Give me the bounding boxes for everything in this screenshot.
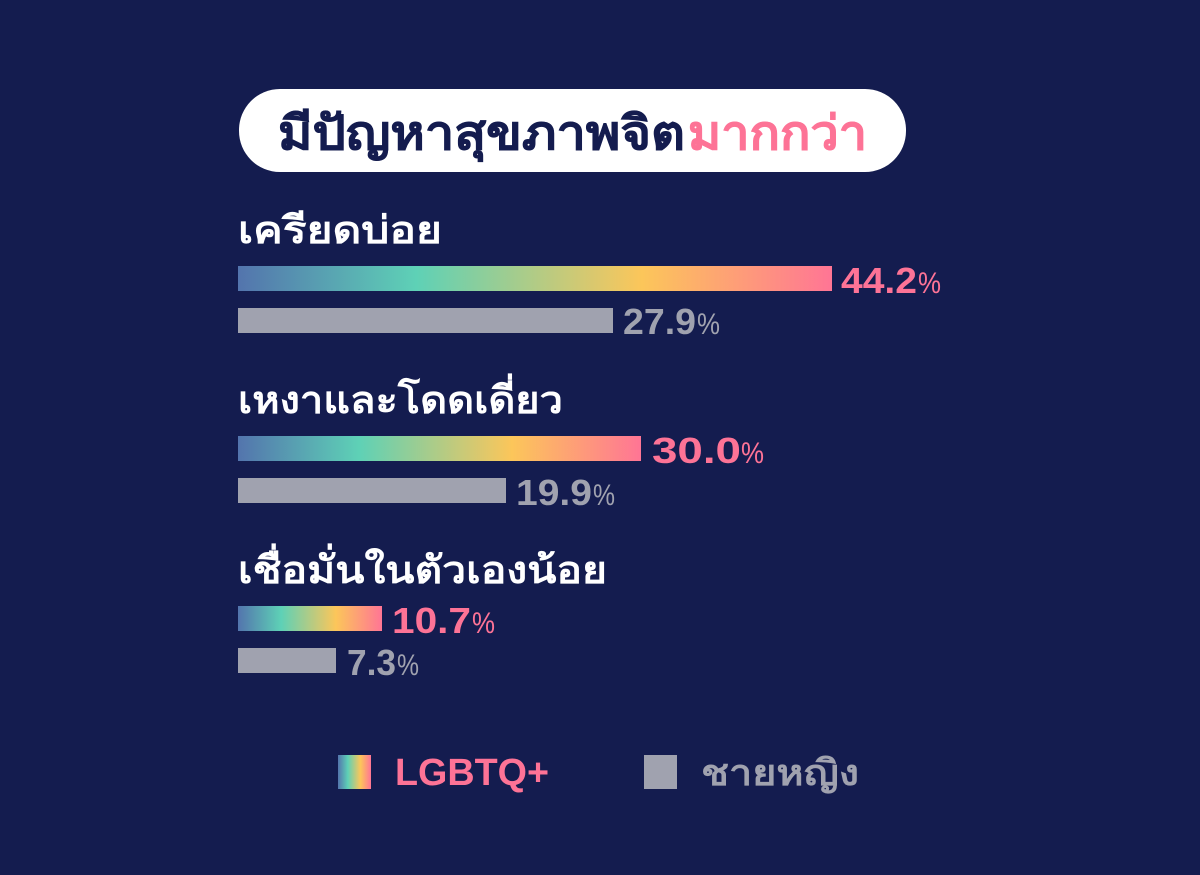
value: 27.9: 27.9	[623, 301, 696, 342]
value: 10.7	[392, 600, 495, 641]
title text	[278, 106, 867, 162]
swatch: gradient	[338, 755, 371, 789]
value: 30.0	[652, 430, 764, 471]
title text: มากกว่า	[688, 106, 867, 159]
value: 19.9: %	[593, 479, 615, 512]
bar: LGBTQ+ 30.0	[238, 436, 641, 461]
bar: general 27.9	[238, 308, 613, 333]
value: 27.9: %	[697, 308, 720, 341]
bar: general 19.9	[238, 478, 506, 503]
value: 7.3	[347, 642, 419, 683]
value: 10.7: %	[472, 607, 495, 640]
value: 30.0: %	[741, 437, 764, 470]
legend: LGBTQ+	[338, 752, 549, 794]
legend: men and women	[644, 752, 859, 794]
label: men and women: ชายหญิง	[701, 752, 859, 794]
group: low confidence	[238, 543, 607, 683]
value: 30.0: 30.0	[652, 430, 741, 471]
value: 10.7: 10.7	[392, 600, 471, 641]
value: 19.9: 19.9	[516, 472, 592, 513]
heading: lonely: เหงาและโดดเดี่ยว	[238, 373, 563, 422]
title pill	[239, 89, 906, 172]
value: 7.3: %	[397, 649, 419, 682]
value: 44.2: %	[918, 267, 941, 300]
heading: stress: เครียดบ่อย	[238, 210, 442, 252]
group: stress	[238, 210, 941, 342]
label: LGBTQ+: LGBTQ+	[395, 752, 549, 794]
heading: low confidence: เชื่อมั่นในตัวเองน้อย	[238, 543, 607, 592]
bar: LGBTQ+ 10.7	[238, 606, 382, 631]
bar: LGBTQ+ 44.2	[238, 266, 832, 291]
title text: มีปัญหาสุขภาพจิต	[278, 106, 685, 162]
bar: general 7.3	[238, 648, 336, 673]
swatch: grey	[644, 755, 677, 789]
group: lonely	[238, 373, 764, 513]
value: 44.2: 44.2	[841, 260, 917, 301]
value: 7.3: 7.3	[347, 642, 396, 683]
